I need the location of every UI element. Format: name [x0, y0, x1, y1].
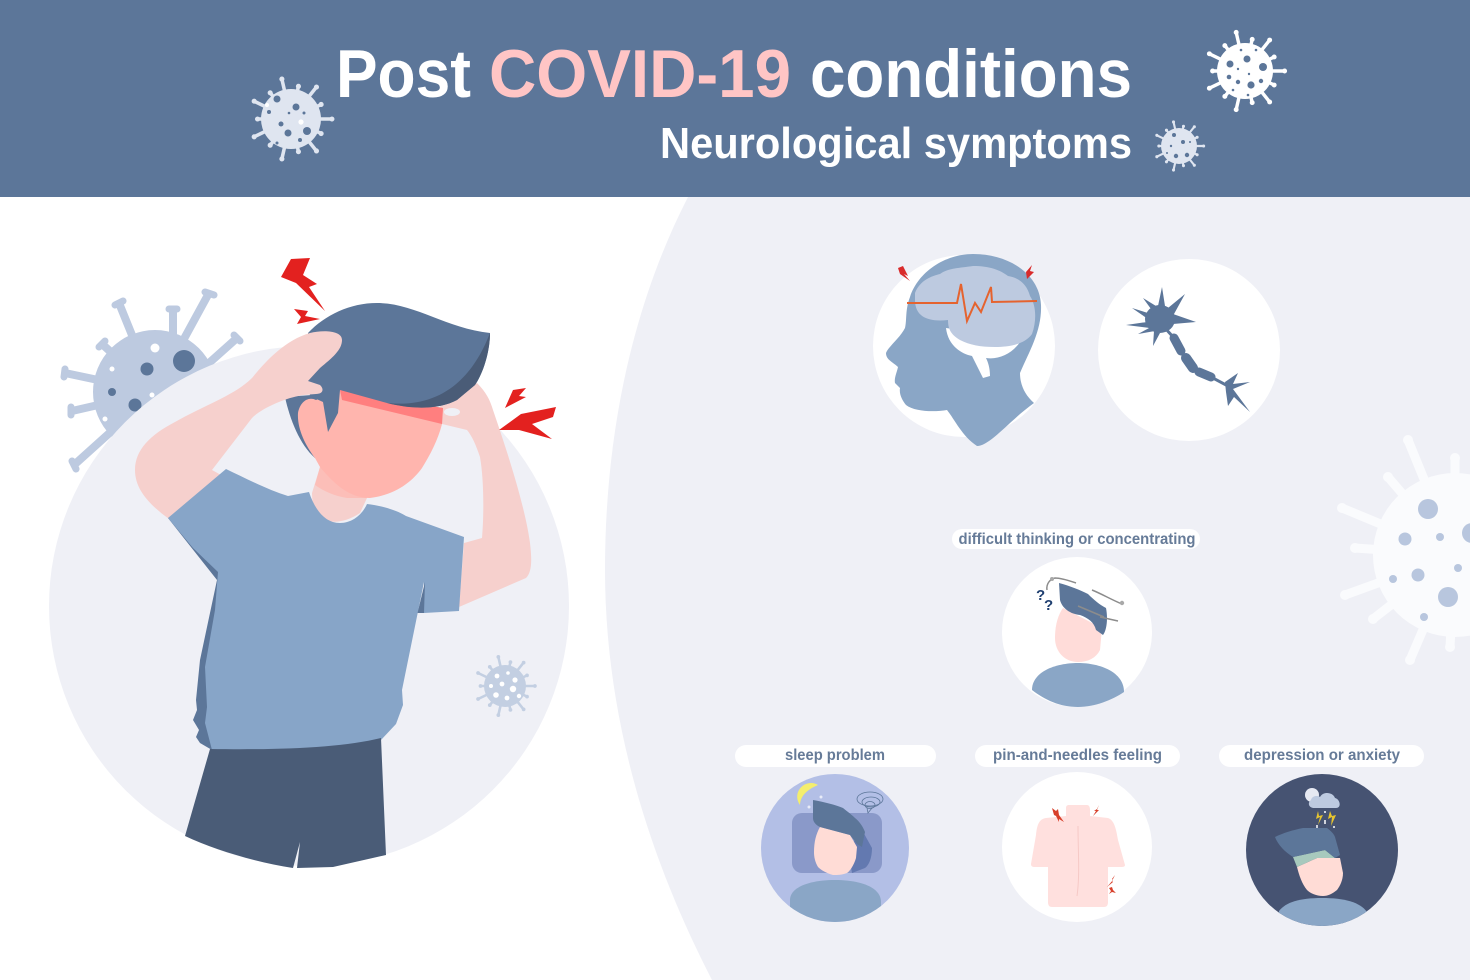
shorts [185, 738, 386, 868]
brain stem [946, 328, 1020, 378]
dizzy rings [1047, 578, 1122, 621]
headband [1293, 850, 1335, 867]
moon [797, 783, 818, 805]
panel: brain illustration [873, 254, 1055, 446]
back hair [285, 394, 325, 460]
label pill: sleep problem [735, 745, 936, 767]
title: Post [336, 36, 471, 112]
pain bolts [898, 265, 1034, 281]
subtitle: Neurological symptoms [660, 119, 1132, 168]
label pill: difficult thinking: difficult thinking or concentrating [958, 531, 1196, 548]
title: COVID-19 [489, 36, 791, 112]
panel: depression icon [1246, 774, 1398, 935]
shirt shade [168, 518, 240, 750]
question marks: ? [1036, 587, 1045, 604]
icon: header virus top right [1209, 32, 1285, 110]
storm cloud [1305, 788, 1319, 802]
pillow [792, 813, 882, 873]
stars [809, 797, 821, 807]
shirt [168, 469, 464, 750]
axon [1165, 328, 1228, 386]
armpit shade [418, 582, 425, 613]
panel: neuron illustration [1098, 259, 1280, 441]
face [1055, 608, 1102, 662]
hair [813, 800, 865, 847]
axon terminal [1225, 373, 1250, 412]
figure: man holding head [135, 303, 531, 868]
right arm [440, 383, 531, 607]
brain [915, 266, 1035, 347]
label pill: sleep problem: sleep problem [785, 747, 885, 764]
shoulders [1032, 663, 1124, 707]
icon: small virus in circle [478, 657, 535, 715]
face and ear [298, 390, 443, 498]
shoulders [1279, 898, 1366, 926]
head silhouette [886, 254, 1041, 446]
hair [1059, 583, 1107, 635]
swirl [857, 792, 883, 813]
icon: header virus left [254, 79, 332, 159]
panel: header band [0, 0, 1470, 197]
face [1297, 858, 1343, 896]
spine [1077, 826, 1079, 896]
icon: large virus behind figure [64, 292, 240, 469]
hair shade [387, 333, 490, 408]
panel: sleep problem icon [761, 774, 909, 930]
face [814, 827, 857, 875]
upper neck [315, 467, 367, 498]
shoulders [790, 880, 881, 922]
hair [1275, 828, 1340, 858]
label pill: depression or anxiety [1219, 745, 1424, 767]
headache band [340, 390, 443, 424]
panel: pin-and-needles icon [1002, 772, 1152, 922]
hand highlight [444, 408, 460, 416]
label pill: depression or anxiety: depression or anxiety [1244, 747, 1400, 764]
label pill: pin-and-needles [975, 745, 1180, 767]
cell body [1126, 287, 1196, 346]
panel: large circle behind figure [49, 346, 569, 866]
title [336, 36, 1132, 112]
back hair [848, 830, 872, 873]
icon: pain bolts top [281, 258, 325, 324]
title: conditions [810, 36, 1132, 112]
left arm and hand [135, 331, 342, 530]
panel: difficult thinking icon: ? [1044, 597, 1053, 614]
panel: difficult thinking icon [1002, 557, 1152, 707]
brain wave [907, 284, 1037, 321]
hair [308, 303, 490, 432]
neck [312, 467, 367, 522]
icon: header virus small [1157, 122, 1204, 170]
back [1031, 805, 1125, 907]
rain and lightning [1316, 811, 1336, 826]
icon: background virus right [1337, 435, 1470, 665]
icon: pain bolts right [499, 388, 556, 439]
panel: right background [605, 197, 1470, 980]
pain bolts [1052, 805, 1116, 894]
label pill: pin-and-needles: pin-and-needles feeling [993, 747, 1162, 764]
